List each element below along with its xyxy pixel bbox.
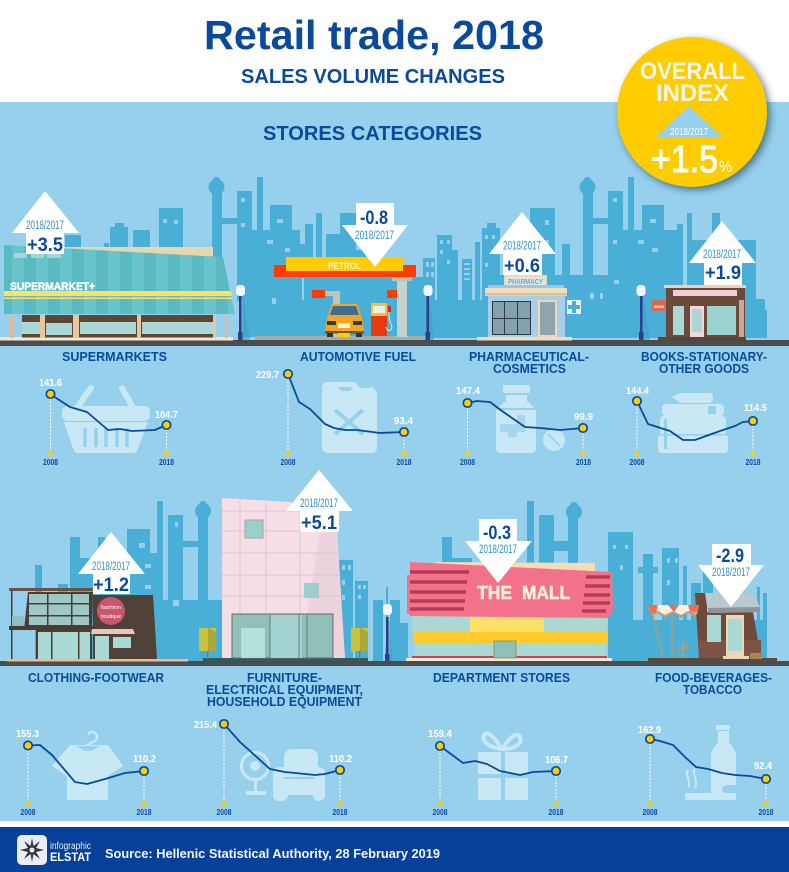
- values: 229.7: [256, 369, 279, 381]
- values: 2008: [280, 458, 296, 467]
- illustration: pharmacy: [477, 275, 581, 340]
- values: 2008: [432, 808, 448, 817]
- illustration: street lamp: [383, 604, 392, 661]
- values: 2008: [630, 458, 645, 467]
- values: [638, 724, 774, 817]
- values: [256, 369, 413, 467]
- badge: overall index: OVERALL: [640, 58, 745, 85]
- illustration: the mall: THE: [477, 583, 512, 603]
- illustration: clothing store: fashion: [101, 605, 121, 611]
- markers: [220, 720, 344, 806]
- arrow: automotive fuel -0.8: -0.8: [360, 208, 388, 229]
- icon: books: [658, 393, 728, 453]
- values: 215.4: [194, 719, 217, 731]
- line: [28, 745, 144, 784]
- heading: CLOTHING-FOOTWEAR: [28, 670, 165, 685]
- illustration: street lamp: [636, 285, 650, 340]
- arrow: furniture +5.1: 2018/2017: [300, 498, 338, 510]
- illustration: supermarket: SUPERMARKET+: [10, 281, 95, 293]
- values: 2018: [758, 808, 774, 817]
- values: 2008: [20, 808, 36, 817]
- line: [224, 724, 340, 775]
- panel: department stores chart: [428, 670, 570, 817]
- values: 2018: [159, 458, 174, 467]
- icon: gift: [478, 733, 528, 800]
- icon: jerrycan: [322, 382, 377, 453]
- skyline bottom row: [35, 501, 767, 661]
- heading line 2: COSMETICS: [493, 361, 566, 376]
- logo text: infographic: [50, 841, 91, 852]
- heading: DEPARTMENT STORES: [433, 670, 570, 685]
- arrow: books +1.9: 2018/2017: [703, 249, 741, 261]
- badge: overall index: [617, 37, 770, 190]
- arrow: supermarkets +3.5: 2018/2017: [26, 220, 64, 232]
- heading: FURNITURE-: [247, 670, 322, 685]
- arrow: books +1.9: +1.9: [705, 263, 741, 284]
- values: 2018: [548, 808, 564, 817]
- skyline top row: [65, 177, 767, 338]
- values: [194, 719, 352, 817]
- illustration: clothing store: [7, 588, 188, 662]
- heading line 2: ELECTRICAL EQUIPMENT,: [206, 682, 363, 697]
- badge: overall index: %: [719, 157, 732, 176]
- values: 162.9: [638, 724, 661, 736]
- line: [637, 401, 753, 440]
- heading: FOOD-BEVERAGES-: [655, 670, 772, 685]
- arrow: books +1.9: [689, 221, 756, 285]
- subtitle: SALES VOLUME CHANGES: [241, 66, 505, 88]
- badge: overall index: 2018/2017: [670, 126, 708, 138]
- footer band: [0, 821, 789, 872]
- illustration: food shop: [647, 593, 777, 661]
- values: 114.5: [744, 402, 767, 414]
- arrow: clothing +1.2: 2018/2017: [92, 561, 130, 573]
- markers: [436, 742, 560, 806]
- line: [50, 394, 166, 431]
- illustration: clothing store: boutique: [101, 614, 121, 620]
- markers: [46, 390, 171, 456]
- section heading: STORES CATEGORIES: [263, 123, 482, 145]
- illustration: supermarket: [0, 245, 235, 340]
- logo text: [50, 841, 92, 864]
- arrow: food -2.9: 2018/2017: [712, 567, 750, 579]
- arrow: department stores -0.3: [465, 519, 532, 583]
- values: 2018: [576, 458, 591, 467]
- values: 104.7: [155, 409, 178, 421]
- values: 99.9: [574, 411, 593, 423]
- values: 155.3: [16, 728, 39, 740]
- values: 2018: [746, 458, 761, 467]
- heading: PHARMACEUTICAL-: [469, 349, 589, 364]
- arrow: furniture +5.1: +5.1: [301, 513, 337, 534]
- values: 2018: [396, 458, 412, 467]
- values: 2008: [43, 458, 58, 467]
- badge: overall index: +1.5: [651, 139, 718, 181]
- panel: food chart: [638, 670, 774, 817]
- arrow: department stores -0.3: 2018/2017: [479, 544, 517, 556]
- markers: [646, 735, 770, 806]
- arrow: food -2.9: -2.9: [716, 546, 744, 567]
- arrow: supermarkets +3.5: +3.5: [27, 235, 63, 256]
- illustration: the mall: [406, 562, 613, 661]
- line: [288, 374, 404, 433]
- arrow: pharmaceutical +0.6: [489, 212, 556, 277]
- markers: [284, 370, 408, 456]
- heading: BOOKS-STATIONARY-: [641, 349, 767, 364]
- illustration: petrol station: PETROL: [328, 261, 361, 271]
- arrow: clothing +1.2: [78, 532, 145, 596]
- arrow: clothing +1.2: +1.2: [93, 575, 129, 596]
- markers: [24, 741, 148, 806]
- values: 110.2: [133, 753, 156, 765]
- panel: furniture chart: [194, 670, 363, 817]
- heading line 2: TOBACCO: [683, 682, 742, 697]
- panel: automotive fuel chart: [256, 349, 416, 467]
- line: [650, 739, 766, 779]
- illustration: book store: [652, 285, 746, 340]
- heading: AUTOMOTIVE FUEL: [300, 349, 416, 364]
- line: [440, 746, 556, 775]
- heading: SUPERMARKETS: [62, 349, 167, 364]
- values: [16, 728, 156, 817]
- arrow: automotive fuel -0.8: [342, 203, 408, 267]
- icon: shirt on hanger: [52, 732, 123, 800]
- illustration: the mall: MALL: [522, 583, 570, 603]
- illustration: street lamp: [424, 285, 434, 340]
- icon: medicine: [496, 385, 565, 453]
- badge: overall index: INDEX: [656, 80, 729, 107]
- values: [428, 728, 568, 817]
- arrow: pharmaceutical +0.6: +0.6: [504, 256, 540, 277]
- panel: supermarkets chart: [39, 349, 178, 467]
- values: 144.4: [626, 385, 649, 397]
- logo icon: [17, 835, 47, 865]
- illustration: petrol station: [255, 257, 426, 340]
- values: 106.7: [545, 754, 568, 766]
- values: 2008: [216, 808, 232, 817]
- illustration: book store: BOOKS: [654, 304, 664, 309]
- arrow: automotive fuel -0.8: 2018/2017: [355, 230, 394, 242]
- values: 2018: [136, 808, 152, 817]
- values: 159.4: [428, 728, 452, 740]
- values: 93.4: [394, 415, 413, 427]
- icon: basket: [62, 388, 150, 453]
- arrow: food -2.9: [698, 544, 764, 607]
- illustration: street lamp: [236, 285, 250, 340]
- arrow: department stores -0.3: -0.3: [483, 523, 511, 544]
- source text: Source: Hellenic Statistical Authority, 28 February 2019: [105, 846, 440, 861]
- values: [39, 377, 178, 467]
- heading line 2: OTHER GOODS: [659, 361, 749, 376]
- markers: [463, 399, 587, 456]
- values: [456, 385, 593, 467]
- illustration: pharmacy: PHARMACY: [508, 279, 543, 286]
- illustration: furniture store: [199, 498, 368, 661]
- logo text: ELSTAT: [50, 850, 92, 864]
- ground lines: [0, 340, 789, 666]
- icon: bottle and cigarette: [685, 725, 736, 800]
- values: 2018: [332, 808, 348, 817]
- markers: [633, 397, 757, 456]
- values: 2008: [642, 808, 658, 817]
- panel: books chart: [626, 349, 767, 467]
- values: 110.2: [329, 753, 352, 765]
- arrow: supermarkets +3.5: [12, 191, 79, 256]
- icon: fan and armchair: [242, 749, 325, 801]
- line: [468, 401, 583, 430]
- values: 2008: [460, 458, 475, 467]
- values: [626, 385, 767, 467]
- arrow: pharmaceutical +0.6: 2018/2017: [503, 240, 541, 252]
- arrow: furniture +5.1: [286, 470, 353, 534]
- values: 141.6: [39, 377, 62, 389]
- panel: clothing chart: [16, 670, 165, 817]
- heading line 3: HOUSEHOLD EQUIPMENT: [207, 694, 362, 709]
- values: 147.4: [456, 385, 480, 397]
- title: Retail trade, 2018: [204, 12, 544, 58]
- panel: pharmaceutical chart: [456, 349, 593, 467]
- values: 92.4: [754, 760, 772, 772]
